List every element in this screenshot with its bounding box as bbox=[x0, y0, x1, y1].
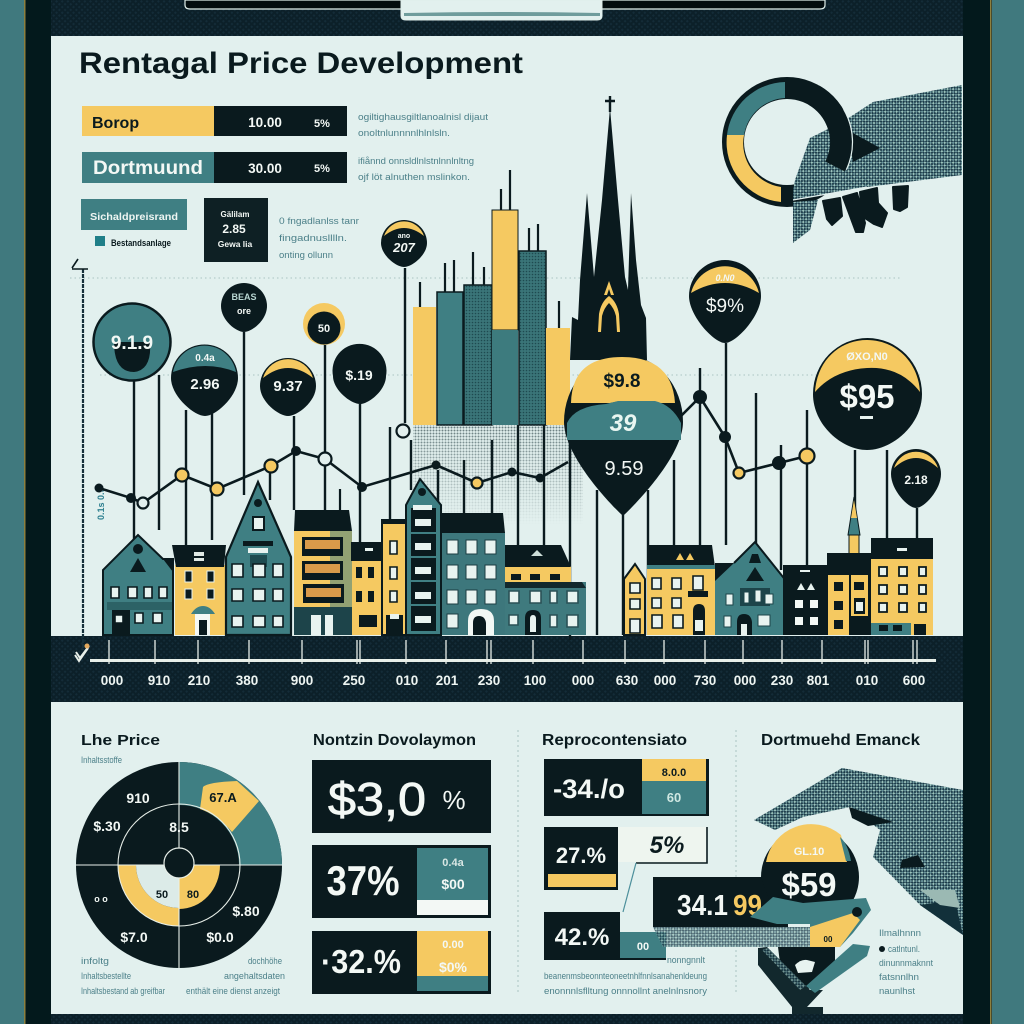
pin: 2.96: 0.4a bbox=[195, 353, 215, 364]
data row: Borop: 5% bbox=[314, 118, 330, 130]
kpi: $3,0 % bbox=[312, 760, 491, 833]
donut notes right: enthält eine dienst anzeigt bbox=[186, 986, 280, 997]
kpi: 37% bbox=[312, 845, 491, 918]
stat box: Gewa lia bbox=[218, 239, 253, 249]
axis labels: 600 bbox=[903, 673, 925, 688]
axis labels: 910 bbox=[148, 673, 170, 688]
row description: Dortmund bbox=[358, 156, 474, 183]
donut chart: 8.5 bbox=[169, 819, 189, 835]
kpi: 37%: $00 bbox=[441, 876, 465, 892]
stat box: Gälilam bbox=[221, 210, 249, 219]
pin: BEAS bbox=[221, 283, 267, 332]
stat: 5% callout bbox=[618, 827, 707, 912]
stat: 27% bbox=[544, 827, 618, 890]
axis labels: 801 bbox=[807, 673, 830, 688]
kpi: $3,0 %: $3,0 bbox=[328, 773, 426, 825]
kpi: 37%: 37% bbox=[326, 857, 400, 904]
top plaque bbox=[185, 0, 825, 20]
pin: 9.37: 9.37 bbox=[273, 378, 303, 395]
lower hand holding the coin bbox=[750, 897, 871, 1014]
houses right group bbox=[624, 497, 933, 635]
pin: teal circle bbox=[94, 304, 170, 380]
house 11 yellow bbox=[647, 545, 715, 635]
houses left group bbox=[103, 479, 586, 635]
data row: Borop bbox=[82, 106, 347, 136]
donut heading: Lhe Price bbox=[81, 732, 160, 749]
halftone strip bbox=[653, 927, 810, 947]
stat: 27%: 27.% bbox=[556, 843, 606, 868]
axis labels: 000 bbox=[734, 673, 756, 688]
pin: $9%: $9% bbox=[706, 296, 744, 317]
legend: Sichaldpreisrand bbox=[90, 212, 178, 223]
donut chart: $7.0 bbox=[120, 929, 148, 945]
stat: 42% bbox=[544, 912, 666, 960]
stat description: onting ollunn bbox=[279, 250, 333, 261]
pin: 2.18: 2.18 bbox=[904, 473, 928, 487]
axis labels bbox=[101, 673, 925, 688]
legend bbox=[81, 199, 187, 249]
stat: 34.1 99: 99 bbox=[733, 890, 762, 922]
section dividers bbox=[518, 730, 736, 995]
pin: large center: 39 bbox=[610, 410, 637, 437]
line chart bbox=[94, 390, 814, 508]
donut chart: o o bbox=[94, 894, 108, 904]
pin: 2.07: ano bbox=[398, 233, 410, 240]
stat: -34%: 8.0.0 bbox=[662, 767, 686, 779]
pin: large center bbox=[564, 355, 683, 516]
house 3 tall teal gable bbox=[226, 482, 291, 635]
donut notes left: infoltg bbox=[81, 956, 109, 967]
donut chart: $.30 bbox=[93, 818, 121, 834]
data row: Dortmund: 30.00 bbox=[248, 161, 282, 176]
skyline bar chart bbox=[413, 170, 583, 525]
hand notes: fatsnnlhn bbox=[879, 972, 919, 983]
hand notes: naunlhst bbox=[879, 986, 915, 997]
pin: BEAS: ore bbox=[237, 306, 251, 316]
axis labels: 000 bbox=[572, 673, 594, 688]
house 2 yellow bbox=[172, 545, 226, 635]
coin: $59: $59 bbox=[781, 866, 837, 903]
house 13 dark bbox=[783, 565, 828, 635]
bottom axis bbox=[75, 640, 936, 664]
axis labels: 201 bbox=[436, 673, 459, 688]
dotted grid lines bbox=[70, 278, 920, 375]
bottom panel heading right: Dortmuehd Emanck bbox=[761, 732, 920, 749]
upper hand halftone bbox=[754, 768, 963, 935]
top right hand bbox=[793, 85, 962, 243]
stat: 34.1 99 bbox=[653, 877, 788, 927]
house 5 yellow bbox=[351, 542, 382, 635]
vertical axis bbox=[72, 259, 106, 658]
data row: Dortmund bbox=[82, 152, 347, 183]
stat: 34.1 99: 34.1 bbox=[677, 890, 728, 922]
stat: 42%: 00 bbox=[637, 941, 649, 953]
donut notes right bbox=[186, 956, 285, 997]
comparison notes bbox=[544, 955, 707, 997]
row description: Dortmund: ifiånnd onnsldlnlstnlnnlnltng bbox=[358, 156, 474, 167]
house 7 tower bbox=[406, 479, 441, 635]
pin: 2.07: 207 bbox=[392, 240, 416, 255]
row description: Borop: onoltnlunnnnlhlnlsln. bbox=[358, 128, 450, 139]
pin: 50 ring bbox=[303, 303, 345, 345]
cathedral silhouette bbox=[570, 96, 647, 360]
data row: Dortmund: Dortmuund bbox=[93, 158, 203, 179]
pin: $.19: $.19 bbox=[345, 367, 373, 383]
hand notes: dinunnmaknnt bbox=[879, 958, 933, 969]
donut chart: 910 bbox=[126, 790, 150, 806]
coin: $59: GL.10 bbox=[794, 846, 824, 858]
house 6 yellow tall bbox=[381, 519, 408, 635]
pin: $95: $95 bbox=[839, 378, 895, 415]
title: Rentagal Price Development bbox=[79, 47, 523, 80]
data row: Dortmund: 5% bbox=[314, 163, 330, 175]
hand notes bbox=[879, 928, 933, 997]
house 14 with spire bbox=[827, 497, 871, 635]
axis labels: 630 bbox=[616, 673, 638, 688]
donut chart: $0.0 bbox=[206, 929, 234, 945]
stat: -34%: 60 bbox=[667, 790, 681, 805]
axis labels: 010 bbox=[856, 673, 878, 688]
donut chart: 50 bbox=[156, 889, 168, 901]
donut chart bbox=[76, 762, 282, 968]
pin: $.19 bbox=[332, 344, 386, 404]
pin: $95 bbox=[813, 338, 922, 450]
row description: Dortmund: ojf löt alnuthen mslinkon. bbox=[358, 172, 470, 183]
axis labels: 230 bbox=[478, 673, 500, 688]
hand notes: Ilmalhnnn bbox=[879, 928, 921, 939]
axis labels: 210 bbox=[188, 673, 210, 688]
kpi: $3,0 %: % bbox=[442, 785, 466, 815]
pin: 9.37 bbox=[260, 358, 316, 416]
row description: Borop bbox=[358, 112, 488, 139]
axis labels: 250 bbox=[343, 673, 365, 688]
pin: $9%: 0.N0 bbox=[715, 273, 735, 283]
top right ring chart bbox=[727, 82, 841, 202]
hand notes: catlntunl. bbox=[888, 944, 920, 955]
axis labels: 230 bbox=[771, 673, 793, 688]
pin: $95: ØXO,N0 bbox=[846, 351, 888, 363]
kpi: 32%: ·32.% bbox=[321, 943, 401, 980]
donut notes right: angehaltsdaten bbox=[224, 971, 285, 982]
month panel heading: Nontzin Dovolaymon bbox=[313, 732, 476, 749]
stat: 5% callout: 5% bbox=[650, 832, 684, 859]
house 15 yellow large bbox=[871, 538, 933, 635]
pin: $9% bbox=[689, 260, 761, 343]
price stems bbox=[134, 268, 917, 640]
stat box: 2.85 bbox=[222, 222, 246, 236]
pin: BEAS: BEAS bbox=[231, 292, 257, 302]
house 9 bbox=[505, 545, 586, 635]
pin: 2.96 bbox=[171, 344, 238, 416]
pin: large center: $9.8 bbox=[604, 371, 640, 392]
data row: Borop: Borop bbox=[92, 115, 139, 132]
stat description bbox=[279, 216, 359, 261]
house 8 teal bbox=[442, 513, 505, 635]
donut heading: Inhaltsstoffe bbox=[81, 755, 122, 766]
pin: 2.07 bbox=[381, 220, 427, 267]
pin: large center: 9.59 bbox=[605, 458, 643, 480]
comparison notes: enonnnlsflltung onnnollnt anelnlnsnory bbox=[544, 986, 707, 997]
pin: 2.96: 2.96 bbox=[190, 376, 220, 393]
kpi: 32% bbox=[312, 931, 491, 994]
pin: 50 ring: 50 bbox=[318, 323, 330, 335]
axis labels: 010 bbox=[396, 673, 418, 688]
donut chart: 80 bbox=[187, 889, 199, 901]
lower hand holding the coin: 00 bbox=[824, 935, 833, 944]
row description: Borop: ogiltighausgiltlanoalnisl dijaut bbox=[358, 112, 488, 123]
house 4 balconies bbox=[294, 489, 352, 635]
comparison notes: nonngnnlt bbox=[667, 955, 705, 966]
donut notes left: Inhaltsbestand ab greifbar bbox=[81, 986, 165, 997]
axis labels: 000 bbox=[101, 673, 123, 688]
house 10 small gable bbox=[624, 564, 645, 635]
stat: 42%: 42.% bbox=[555, 924, 609, 951]
donut chart: $.80 bbox=[232, 903, 260, 919]
donut heading bbox=[81, 732, 160, 766]
donut notes right: dochhöhe bbox=[248, 956, 282, 967]
vertical axis: 0.1s 0.9 bbox=[96, 487, 106, 520]
data row: Borop: 10.00 bbox=[248, 115, 282, 130]
stat description: 0 fngadlanlss tanr bbox=[279, 216, 359, 227]
bottom panel background bbox=[51, 702, 963, 1014]
kpi: 32%: $0% bbox=[439, 959, 468, 975]
legend: Bestandsanlage bbox=[111, 238, 171, 249]
donut chart: 67.A bbox=[209, 790, 237, 805]
stat: -34%: -34./o bbox=[553, 774, 625, 804]
axis labels: 380 bbox=[236, 673, 258, 688]
comparison heading: Reprocontensiato bbox=[542, 732, 687, 749]
pin: 2.18 bbox=[891, 449, 941, 508]
axis labels: 730 bbox=[694, 673, 716, 688]
stat box bbox=[204, 198, 268, 262]
kpi: 32%: 0.00 bbox=[442, 939, 464, 951]
axis labels: 900 bbox=[291, 673, 313, 688]
stat description: fingadnuslllln. bbox=[279, 233, 347, 244]
house 1 teal gable bbox=[103, 535, 173, 635]
pin: teal circle: 9.1.9 bbox=[111, 333, 153, 354]
top panel background bbox=[51, 36, 963, 636]
coin: $59 bbox=[761, 824, 859, 924]
axis labels: 000 bbox=[654, 673, 676, 688]
house 12 teal gable bbox=[715, 542, 787, 635]
stat: -34% bbox=[544, 759, 709, 816]
donut notes left: Inhaltsbestellte bbox=[81, 971, 131, 982]
axis labels: 100 bbox=[524, 673, 546, 688]
comparison notes: beanenmsbeonnteoneetnhlfnnlsanahenldeung bbox=[544, 971, 707, 982]
donut notes left bbox=[81, 956, 165, 997]
kpi: 37%: 0.4a bbox=[442, 857, 465, 869]
